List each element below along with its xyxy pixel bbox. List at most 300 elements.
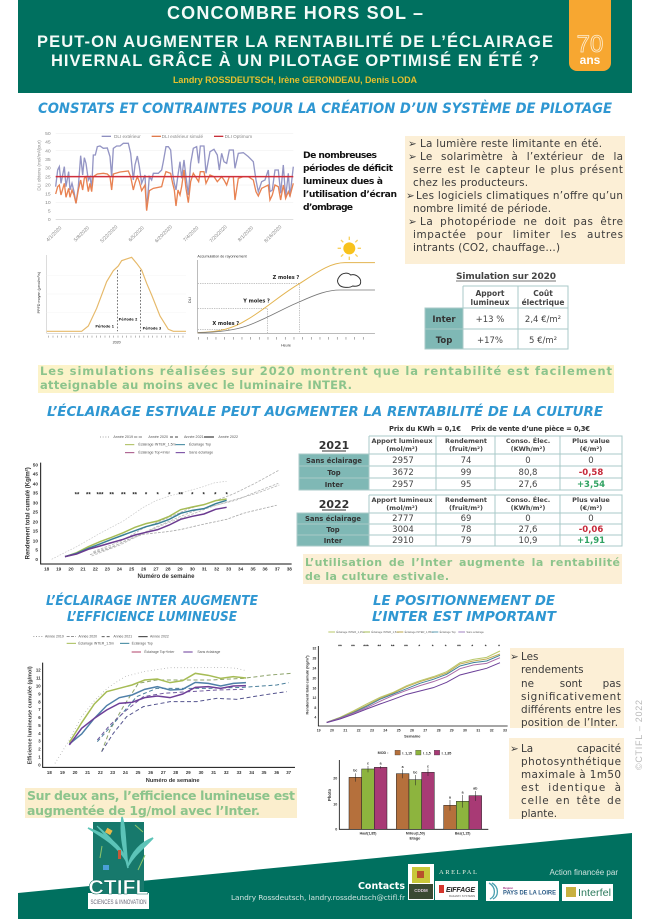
legend	[102, 134, 252, 139]
line chart: efficience lumineuse: 28	[173, 770, 179, 775]
line chart: positions inter: 31	[476, 729, 480, 733]
line chart: rendement cumule: 28	[165, 566, 171, 571]
line chart: efficience lumineuse: 5	[38, 723, 41, 728]
line chart: rendement cumule: 20	[33, 519, 38, 524]
text panel: constraints: intrants (CO2, chauffage…)	[413, 242, 560, 254]
line chart: efficience lumineuse: 23	[110, 770, 116, 775]
line chart: rendement cumule: 50	[33, 462, 38, 467]
legend: DLI Optimum	[225, 134, 252, 139]
line chart: efficience lumineuse: 22	[98, 770, 103, 775]
contacts: Landry Rossdeutsch, landry.rossdeutsch@ctifl.fr	[231, 893, 406, 902]
text panel: constraints: nombre limité de période.	[413, 203, 551, 215]
badge: 70 ans	[569, 0, 611, 71]
chart: accumulation curves: Y moles ?	[242, 299, 270, 305]
line chart: DLI over time: 50	[45, 131, 51, 137]
table: 2022: 27,6	[519, 525, 537, 535]
chart annotation: l’utilisation d’écran	[303, 189, 397, 200]
icon: sun	[338, 237, 361, 260]
line chart: efficience lumineuse: 9	[38, 691, 41, 696]
text panel: rendements: position de l’Inter.	[521, 717, 618, 729]
line chart: rendement cumule: 27	[153, 566, 159, 571]
line chart: efficience lumineuse: 1	[38, 755, 41, 760]
line chart: rendement cumule	[24, 435, 292, 580]
line chart: efficience lumineuse: 8	[38, 699, 41, 704]
legend: Éclairage INTER_1,5m	[371, 629, 399, 634]
bar chart: photosynthese: 0	[335, 828, 337, 832]
table: 2021: (fruit/m²)	[449, 445, 483, 453]
legend: Année 2020	[148, 435, 168, 439]
contacts: Contacts	[358, 881, 405, 892]
table: simulation 2020: Top	[436, 336, 452, 346]
icon: cloud	[338, 273, 361, 287]
line chart: DLI over time: 5/8/2020	[73, 225, 91, 243]
callout: efficience: Sur deux ans, l’efficience lumineuse est	[27, 788, 295, 803]
legend: Éclairage Top+Inter	[138, 450, 171, 455]
chart: PPFD bell curve: Période 1	[95, 324, 115, 328]
line chart: positions inter: **	[391, 644, 395, 649]
line chart: rendement cumule: 24	[117, 566, 122, 571]
logo: EIFFAGE	[435, 881, 478, 900]
table: 2021: Top	[327, 469, 341, 477]
line chart: efficience lumineuse: 27	[161, 770, 166, 775]
line chart: positions inter: 30	[463, 729, 467, 733]
chart annotation: lumineux dues à	[303, 176, 383, 187]
line chart: rendement cumule: **	[86, 492, 91, 498]
line chart: positions inter: 4	[314, 716, 316, 720]
table: 2022: 2910	[392, 536, 414, 546]
text panel: capacite photosynthetique: capacité	[577, 743, 621, 755]
callout: inter rentabilite	[303, 554, 622, 584]
table: 2022: 3004	[392, 525, 414, 535]
table: 2021: 0	[588, 456, 594, 466]
line chart: positions inter: 20	[330, 729, 334, 733]
legend: I_1,5	[423, 751, 431, 755]
year 2022: 2022	[319, 498, 349, 511]
chart: PPFD bell curve	[37, 255, 186, 344]
line chart: efficience lumineuse: 7	[38, 707, 41, 712]
legend: Année 2022	[218, 435, 238, 439]
line chart: rendement cumule: 10	[33, 538, 38, 543]
text panel: capacite photosynthetique: celle en tête de	[521, 795, 621, 807]
table: 2022: -0,06	[579, 525, 603, 535]
chart: PPFD bell curve: 2020	[113, 340, 121, 344]
table: 2021: Sans éclairage	[306, 457, 362, 465]
table: simulation 2020: Inter	[432, 315, 456, 325]
line chart: DLI over time: 10	[45, 200, 51, 206]
line chart: DLI over time: 20	[45, 183, 51, 189]
line chart: positions inter: 22	[357, 729, 361, 733]
text panel: constraints: serre est le capteur le plus présent	[413, 164, 623, 176]
chart annotation	[303, 150, 397, 213]
table: simulation 2020: +13 %	[476, 315, 504, 325]
table: 2021: (€/m²)	[580, 445, 602, 453]
bar chart: photosynthese: ab	[473, 787, 477, 791]
line chart: rendement cumule: 32	[214, 566, 220, 571]
text panel: constraints	[405, 136, 625, 264]
bar chart: photosynthese: bc	[353, 769, 357, 773]
line chart: rendement cumule: 37	[275, 566, 280, 571]
line chart: rendement cumule: **	[109, 492, 115, 498]
table: 2021: 2957	[392, 480, 414, 490]
line chart: efficience lumineuse: 18	[47, 770, 52, 775]
bar chart: photosynthese: Milieu(1,50)	[406, 831, 425, 835]
legend: Éclairage INTER_1.5m	[78, 640, 114, 645]
callout: inter rentabilite: de la culture estivale.	[305, 570, 449, 583]
line chart: efficience lumineuse: 11	[36, 675, 41, 680]
text panel: capacite photosynthetique: est identique à	[521, 782, 621, 794]
table: simulation 2020: Coût	[533, 289, 553, 298]
line chart: positions inter: *	[432, 644, 434, 649]
table: 2021: 3672	[392, 468, 414, 478]
text panel: capacite photosynthetique: plante.	[521, 808, 557, 820]
line chart: positions inter: 33	[503, 729, 507, 733]
section heading: efficience: L’ÉCLAIRAGE INTER AUGMENTE	[46, 592, 259, 609]
line chart: positions inter: 16	[312, 686, 316, 690]
bar chart: photosynthese: Photo	[327, 789, 332, 801]
line chart: rendement cumule: 33	[226, 566, 232, 571]
text panel: constraints: impactée pour limiter les autres	[413, 229, 623, 241]
line chart: positions inter: ***	[363, 644, 369, 649]
line chart: positions inter: 8	[314, 706, 316, 710]
footer band	[18, 833, 632, 919]
legend	[100, 435, 238, 455]
legend: Sans éclairage	[466, 630, 484, 634]
logo: CDDM	[408, 864, 434, 900]
bar chart: photosynthese	[327, 750, 488, 840]
table: 2022: 0	[588, 514, 594, 524]
bar chart: photosynthese: a	[462, 791, 464, 795]
line chart: positions inter: Rendement total cumulé (Kg/m²)	[305, 655, 310, 714]
line chart: rendement cumule: *	[145, 492, 148, 498]
text panel: constraints: ➢	[408, 138, 417, 150]
logo: ARELPAL: ARELPAL	[439, 869, 477, 876]
table: 2022: (fruit/m²)	[449, 504, 483, 512]
year 2021: 2021	[319, 439, 349, 452]
chart annotation: périodes de déficit	[303, 163, 394, 174]
table: simulation 2020	[425, 272, 568, 349]
section heading: eclairage estivale: L’ÉCLAIRAGE ESTIVALE PEUT AUGMENTER LA RENTABILITÉ DE LA CULTURE	[47, 403, 604, 420]
line chart: DLI over time: 7/20/2020	[209, 224, 229, 244]
line chart: rendement cumule: 45	[33, 472, 38, 477]
text panel: rendements: sont	[560, 678, 582, 690]
text panel: constraints: ➢	[408, 151, 417, 163]
text panel: capacite photosynthetique: photosynthétique	[521, 756, 621, 768]
line chart: positions inter: 12	[312, 696, 316, 700]
table: 2022: Sans éclairage	[305, 515, 361, 523]
bar chart: photosynthese: 20	[333, 777, 337, 781]
table: 2021: 99	[461, 468, 471, 478]
title	[37, 3, 553, 70]
line chart: rendement cumule: 5	[35, 548, 38, 553]
callout: simulations: Les simulations réalisées sur 2020 montrent que la rentabilité est facilement	[40, 364, 612, 378]
line chart: rendement cumule: 30	[190, 566, 195, 571]
line chart: rendement cumule: 34	[238, 566, 244, 571]
line chart: rendement cumule: 30	[33, 500, 38, 505]
legend: Éclairage INTER_1.5m	[138, 442, 176, 447]
callout: simulations	[38, 364, 614, 393]
text panel: rendements: significativement	[521, 691, 621, 703]
line chart: rendement cumule: 26	[141, 566, 147, 571]
line chart: rendement cumule: Rendement total cumulé (Kg/m²)	[24, 467, 31, 559]
line chart: positions inter: **	[338, 644, 342, 649]
line chart: efficience lumineuse: 20	[73, 770, 78, 775]
chart: accumulation curves: Heure	[281, 344, 291, 348]
text panel: constraints: Les logiciels climatiques n’offre qu’un	[416, 190, 623, 202]
table: 2022: +1,91	[577, 536, 605, 546]
chart annotation: d’ombrage	[303, 202, 353, 213]
table: 2021: 74	[461, 456, 471, 466]
line chart: DLI over time: DLI obtenu (mol/m²/jour)	[37, 140, 42, 191]
legend: DLI extérieur simulé	[162, 134, 203, 139]
chart: accumulation curves: Accumulation de rayonnement	[197, 254, 247, 258]
line chart: rendement cumule: 0	[35, 557, 38, 562]
chart: accumulation curves	[187, 237, 375, 348]
title: CONCOMBRE HORS SOL –	[167, 3, 423, 23]
line chart: rendement cumule: *	[168, 492, 171, 498]
line chart: DLI over time: 25	[45, 174, 51, 180]
chart: accumulation curves: Z moles ?	[273, 275, 299, 281]
bar chart: photosynthese: Haut(1,85)	[360, 831, 376, 835]
legend: Éclairage Top	[132, 640, 153, 645]
line chart: rendement cumule: 18	[44, 566, 50, 571]
chart: accumulation curves: DLI	[187, 297, 192, 303]
line chart: rendement cumule: 40	[33, 481, 38, 486]
line chart: rendement cumule: **	[121, 492, 126, 498]
text panel: constraints: La lumière reste limitante en été.	[420, 138, 602, 150]
line chart: rendement cumule: *	[156, 492, 159, 498]
line chart: rendement cumule: 23	[105, 566, 110, 571]
table: simulation 2020: Apport	[476, 289, 505, 298]
line chart: positions inter: 32	[490, 729, 494, 733]
authors: Landry ROSSDEUTSCH, Irène GERONDEAU, Denis LODA	[173, 75, 418, 85]
chart: PPFD bell curve: Période 2	[119, 318, 138, 322]
bar chart: photosynthese: bc	[413, 770, 417, 774]
text panel: constraints: ➢	[408, 216, 417, 228]
line chart: positions inter: *	[445, 644, 447, 649]
legend: Année 2020	[78, 635, 97, 639]
logo: EIFFAGE: RAILWAY SYSTEMS	[449, 894, 475, 898]
line chart: DLI over time: 6/20/2020	[154, 224, 174, 244]
section heading: positionnement: LE POSITIONNEMENT DE	[373, 593, 556, 609]
bar chart: photosynthese: a	[402, 765, 404, 769]
line chart: rendement cumule: 22	[93, 566, 98, 571]
line chart: positions inter	[305, 629, 508, 739]
line chart: positions inter: *	[498, 644, 500, 649]
legend	[328, 629, 484, 634]
legend: Éclairage INTER_1,15m	[336, 629, 366, 634]
text panel: rendements	[510, 648, 624, 729]
table: 2022: 79	[461, 536, 471, 546]
legend: Éclairage INTER_1,85m	[405, 629, 434, 634]
logo: Interfel: Interfel	[578, 888, 611, 899]
line chart: rendement cumule: *	[202, 492, 205, 498]
section heading: constats: CONSTATS ET CONTRAINTES POUR LA CRÉATION D’UN SYSTÈME DE PILOTAGE	[38, 100, 612, 117]
line chart: efficience lumineuse: 2	[38, 747, 41, 752]
table: 2021: +3,54	[577, 480, 605, 490]
table: 2022: 78	[461, 525, 471, 535]
bar chart: photosynthese: a	[380, 762, 382, 766]
text panel: rendements: ➢	[510, 651, 519, 663]
logo: CTIFL: CTIFL	[88, 877, 148, 899]
text panel: capacite photosynthetique: maximale à 1m50	[521, 769, 621, 781]
logo: Pays de la Loire: PAYS DE LA LOIRE	[503, 890, 556, 896]
line chart: positions inter: 27	[423, 729, 427, 733]
line chart: efficience lumineuse: 10	[36, 683, 41, 688]
logo: Pays de la Loire: Région	[503, 886, 513, 890]
logo: CDDM: CDDM	[414, 888, 428, 893]
line chart: positions inter: 19	[317, 729, 321, 733]
line chart: efficience lumineuse: 19	[60, 770, 65, 775]
line chart: positions inter: 28	[437, 729, 441, 733]
table: 2021	[299, 436, 622, 490]
table: 2022: (KWh/m²)	[511, 504, 545, 512]
line chart: positions inter: **	[351, 644, 355, 649]
legend: I_1,85	[442, 751, 451, 755]
line chart: DLI over time: 8/1/2020	[237, 225, 255, 243]
text panel: capacite photosynthetique: ➢	[510, 743, 519, 755]
line chart: efficience lumineuse: 26	[148, 770, 154, 775]
legend: MOD :	[378, 751, 388, 755]
line chart: rendement cumule: 35	[250, 566, 256, 571]
line chart: DLI over time: 4/1/2020	[45, 225, 63, 243]
line chart: DLI over time: 40	[45, 148, 51, 154]
legend: Sans éclairage	[197, 650, 220, 654]
table: 2022: Inter	[324, 537, 343, 545]
section heading: efficience	[46, 592, 259, 625]
legend: Éclairage Top	[189, 442, 211, 447]
line chart: efficience lumineuse: 29	[186, 770, 191, 775]
badge: 70 ans: 70	[577, 31, 603, 58]
line chart: rendement cumule: Numéro de semaine	[138, 574, 195, 580]
line chart: rendement cumule: **	[178, 492, 184, 498]
line chart: DLI over time: 6/5/2020	[128, 225, 146, 243]
table: 2022: 0	[525, 514, 531, 524]
table: 2021: 2957	[392, 456, 414, 466]
table: 2022: (mol/m²)	[386, 504, 418, 512]
text panel: capacite photosynthetique	[509, 738, 624, 820]
legend: DLI extérieur	[114, 134, 141, 139]
line chart: efficience lumineuse: 21	[85, 770, 91, 775]
line chart: DLI over time: 5	[48, 209, 51, 215]
line chart: rendement cumule: 36	[262, 566, 268, 571]
table: 2022: Conso. Élec.	[506, 495, 550, 504]
line chart: rendement cumule: 35	[33, 491, 38, 496]
table: 2022: (€/m²)	[580, 504, 602, 512]
table: 2021: -0,58	[579, 468, 603, 478]
legend	[33, 635, 220, 654]
table: 2021: 27,6	[519, 480, 537, 490]
table: simulation 2020: +17%	[477, 336, 503, 346]
line chart: rendement cumule: *	[191, 492, 194, 498]
bar chart: photosynthese: c	[427, 764, 429, 768]
line chart: DLI over time: 30	[45, 166, 51, 172]
text panel: capacite photosynthetique: La	[521, 743, 533, 755]
table: 2021: Apport lumineux	[371, 437, 433, 445]
line chart: efficience lumineuse: 32	[224, 770, 229, 775]
line chart: DLI over time: 35	[45, 157, 51, 163]
price assumptions	[389, 425, 590, 433]
legend: Éclairage Top+Inter	[144, 649, 175, 654]
line chart: positions inter: *	[418, 644, 420, 649]
header banner	[18, 0, 632, 93]
table: 2021: 0	[525, 456, 531, 466]
line chart: efficience lumineuse: 0	[38, 763, 41, 768]
table: 2021: Inter	[325, 481, 344, 489]
line chart: rendement cumule: 31	[202, 566, 207, 571]
line chart: rendement cumule: 15	[33, 529, 38, 534]
line chart: positions inter: 20	[312, 676, 316, 680]
line chart: positions inter: Semaine	[404, 734, 421, 739]
line chart: DLI over time: 45	[45, 140, 51, 146]
chart: PPFD bell curve: PPFD moyen (µmol/m²/s)	[37, 272, 41, 313]
line chart: positions inter: 21	[343, 729, 347, 733]
line chart: positions inter: 23	[370, 729, 374, 733]
line chart: positions inter: 29	[450, 729, 454, 733]
line chart: DLI over time: 7/4/2020	[182, 225, 200, 243]
callout: efficience	[25, 788, 297, 818]
text panel: rendements: ne	[521, 678, 534, 690]
logo: EIFFAGE: EIFFAGE	[446, 887, 475, 894]
line chart: efficience lumineuse: 12	[36, 667, 41, 672]
line chart: rendement cumule: 25	[33, 510, 38, 515]
line chart: efficience lumineuse: 33	[237, 770, 242, 775]
line chart: positions inter: *	[485, 644, 487, 649]
chart: accumulation curves: X moles ?	[212, 321, 239, 327]
line chart: efficience lumineuse: 31	[211, 770, 217, 775]
line chart: rendement cumule: 38	[287, 566, 292, 571]
title: PEUT-ON AUGMENTER LA RENTABILITÉ DE L’ÉCLAIRAGE	[37, 32, 553, 51]
logo: CTIFL: SCIENCES & INNOVATION	[90, 900, 146, 906]
table: 2022: Apport lumineux	[371, 496, 433, 504]
table: 2022: Rendement	[445, 496, 487, 504]
line chart: DLI over time: 8/16/2020	[263, 224, 283, 244]
line chart: positions inter: 32	[312, 647, 316, 651]
chart: PPFD bell curve: Période 3	[143, 326, 162, 330]
line chart: rendement cumule: ***	[96, 492, 104, 498]
line chart: positions inter: **	[404, 644, 408, 649]
table: 2021: 80,8	[519, 468, 537, 478]
logo: Interfel	[562, 884, 613, 901]
line chart: DLI over time: 5/22/2020	[99, 224, 119, 244]
line chart: efficience lumineuse: 4	[38, 731, 41, 736]
text panel: constraints: chez les producteurs.	[413, 177, 528, 189]
table: 2021: Rendement	[445, 437, 487, 445]
line chart: rendement cumule: **	[132, 492, 138, 498]
text panel: rendements: rendements	[521, 664, 584, 676]
table: 2021: (mol/m²)	[386, 445, 418, 453]
line chart: DLI over time: 15	[45, 191, 51, 197]
section heading: positionnement	[372, 593, 558, 625]
table: 2021: 95	[461, 480, 471, 490]
table: simulation 2020: lumineux	[471, 298, 510, 307]
table: simulation 2020: 5 €/m²	[529, 336, 557, 346]
line chart: rendement cumule: 19	[56, 566, 62, 571]
legend: Année 2019	[113, 435, 133, 439]
line chart: efficience lumineuse: 24	[123, 770, 128, 775]
line chart: positions inter: 26	[410, 729, 414, 733]
line chart: efficience lumineuse	[27, 635, 295, 784]
badge: 70 ans: ans	[580, 53, 601, 67]
line chart: rendement cumule: 21	[80, 566, 86, 571]
price assumptions: Prix de vente d’une pièce = 0,3€	[471, 425, 590, 433]
legend: Éclairage Top	[440, 629, 456, 634]
line chart: rendement cumule: 25	[129, 566, 135, 571]
line chart: rendement cumule: *	[225, 492, 228, 498]
legend	[378, 750, 451, 755]
line chart: rendement cumule: 29	[177, 566, 183, 571]
price assumptions: Prix du KWh = 0,1€	[389, 425, 461, 433]
text panel: constraints: ➢	[406, 190, 415, 202]
